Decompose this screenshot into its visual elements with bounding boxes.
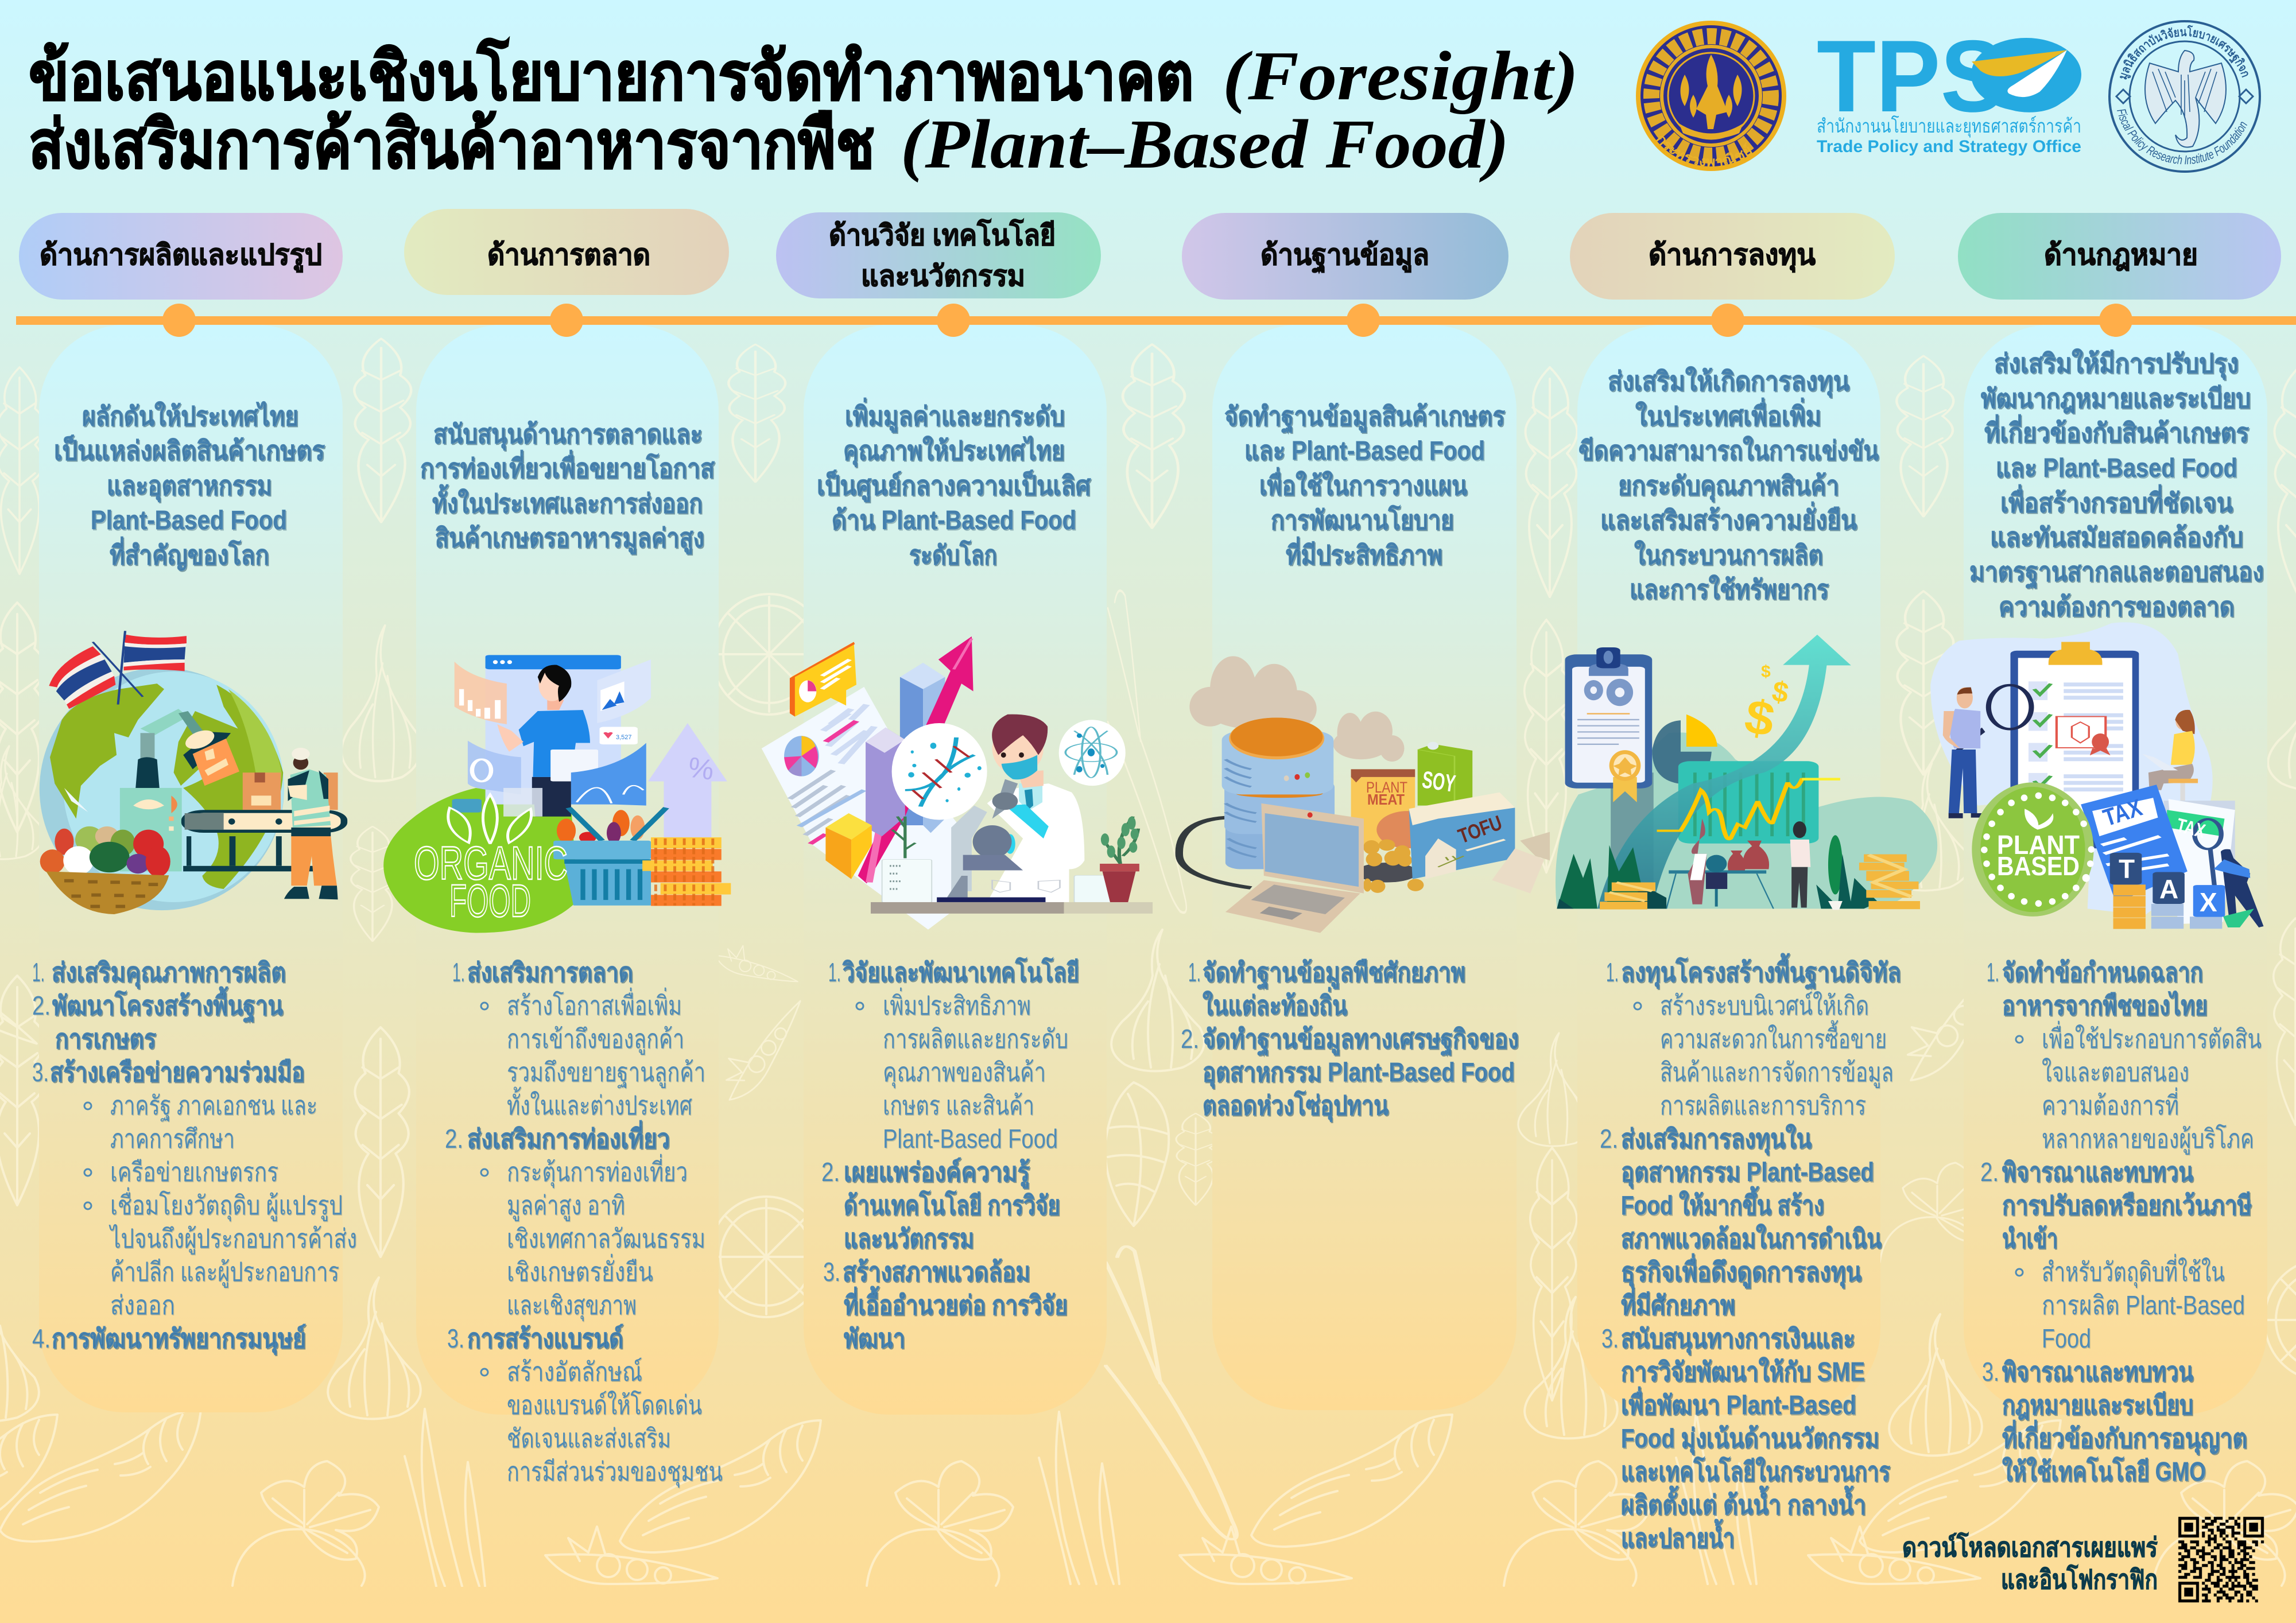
illustration: regulation checklist, plant based seal and tax: A (2159, 874, 2178, 904)
intro text: research: ระดับโลก (909, 539, 997, 570)
illustration: regulation checklist, plant based seal and tax: PLANT (1997, 830, 2080, 860)
list: research: คุณภาพของสินค้า (883, 1057, 1046, 1089)
illustration: organic food and online marketing: % (686, 751, 716, 786)
logo: fiscal policy research institute foundation: Fiscal Policy Research Institute Foundation (2117, 109, 2247, 164)
list: law: กฎหมายและระเบียบ (2002, 1390, 2193, 1420)
list: research: ที่เอื้ออำนวยต่อ การวิจัย (844, 1286, 1068, 1320)
list: marketing: ชัดเจนและส่งเสริม (507, 1423, 671, 1453)
list: research: สร้างสภาพแวดล้อม (843, 1257, 1030, 1287)
list: investment: เพื่อพัฒนา Plant-Based (1621, 1387, 1856, 1420)
heading: law: ด้านกฎหมาย (2044, 239, 2198, 271)
list: database: จัดทำฐานข้อมูลทางเศรษฐกิจของ (1203, 1024, 1519, 1056)
logo: TPSO (1817, 19, 2081, 156)
list: investment: การวิจัยพัฒนาให้กับ SME (1621, 1356, 1865, 1387)
list: investment: 2. (1600, 1124, 1618, 1154)
list: investment: Food มุ่งเน้นด้านนวัตกรรม (1621, 1423, 1879, 1455)
list: law: อาหารจากพืชของไทย (2002, 991, 2208, 1020)
footer download note (1902, 1532, 2158, 1594)
list: investment: อุตสาหกรรม Plant-Based (1621, 1157, 1874, 1189)
list: law: พิจารณาและทบทวน (2002, 1157, 2193, 1187)
intro text: database (1224, 401, 1505, 570)
list: database: 2. (1181, 1024, 1199, 1054)
heading: database (1182, 213, 1508, 300)
list: research: ด้านเทคโนโลยี การวิจัย (844, 1190, 1060, 1220)
panel: marketing (383, 209, 731, 1488)
heading: marketing: ด้านการตลาด (487, 239, 650, 271)
list: law: จัดทำข้อกำหนดฉลาก (2002, 957, 2203, 987)
list: investment: 3. (1601, 1323, 1619, 1353)
list: law: นำเข้า (2002, 1224, 2058, 1253)
list: marketing: 1. (452, 957, 465, 987)
list: production: การพัฒนาทรัพยากรมนุษย์ (52, 1323, 306, 1355)
illustration: database server, laptop and plant-based foods (1179, 656, 1550, 933)
illustration: globe, factory, worker, vegetables (40, 631, 344, 914)
list: marketing: มูลค่าสูง อาทิ (507, 1190, 625, 1221)
intro text: law: เพื่อสร้างกรอบที่ชัดเจน (2000, 484, 2233, 518)
list: production (32, 957, 357, 1355)
list: investment: สภาพแวดล้อมในการดำเนิน (1621, 1223, 1882, 1253)
illustration: investment growth chart: $ (1761, 662, 1771, 681)
intro text: law: และ Plant-Based Food (1996, 453, 2237, 483)
list: investment (1600, 953, 1901, 1553)
list: investment: สินค้าและการจัดการข้อมูล (1660, 1057, 1894, 1088)
illustration: regulation checklist, plant based seal and tax: T (2119, 854, 2135, 884)
list: production: 3. (32, 1057, 49, 1087)
list: production: ส่งเสริมคุณภาพการผลิต (52, 957, 286, 989)
list: marketing: 2. (445, 1124, 463, 1154)
list: investment: และเทคโนโลยีในกระบวนการ (1621, 1456, 1890, 1486)
intro text: marketing: การท่องเที่ยวเพื่อขยายโอกาส (420, 450, 715, 483)
list: investment: สนับสนุนทางการเงินและ (1621, 1323, 1855, 1355)
timeline (16, 304, 2296, 337)
list: investment: ธุรกิจเพื่อดึงดูดการลงทุน (1621, 1253, 1861, 1288)
list: marketing: กระตุ้นการท่องเที่ยว (507, 1154, 688, 1189)
QR code (2178, 1519, 2264, 1601)
illustration: regulation checklist, plant based seal and tax (1930, 622, 2264, 929)
list: investment: ลงทุนโครงสร้างพื้นฐานดิจิทัล (1621, 953, 1901, 989)
list: law: การปรับลดหรือยกเว้นภาษี (2002, 1190, 2252, 1220)
list: production: ส่งออก (110, 1290, 175, 1320)
list: database (1181, 957, 1519, 1122)
title line 2: ส่งเสริมการค้าสินค้าอาหารจากพืช (29, 109, 875, 183)
intro text: production: ผลักดันให้ประเทศไทย (82, 401, 298, 431)
list: law: 3. (1982, 1357, 1999, 1387)
illustration: regulation checklist, plant based seal and tax: X (2200, 887, 2217, 917)
list: marketing (445, 957, 723, 1488)
list: marketing: ส่งเสริมการตลาด (467, 957, 633, 987)
list: marketing: ส่งเสริมการท่องเที่ยว (467, 1120, 670, 1154)
list: research: การผลิตและยกระดับ (883, 1024, 1068, 1054)
intro text: production (54, 401, 325, 570)
heading: production: ด้านการผลิตและแปรรูป (40, 239, 322, 273)
panel: research, technology, innovation (762, 212, 1153, 1353)
illustration: investment growth chart: $ (1741, 689, 1778, 747)
heading: investment (1570, 213, 1895, 300)
intro text: database: การพัฒนานโยบาย (1271, 504, 1454, 535)
list: investment: Food ให้มากขึ้น สร้าง (1621, 1186, 1824, 1220)
intro text: law: ส่งเสริมให้มีการปรับปรุง (1994, 348, 2239, 380)
list: database: อุตสาหกรรม Plant-Based Food (1203, 1057, 1515, 1089)
intro text: production: เป็นแหล่งผลิตสินค้าเกษตร (54, 434, 325, 465)
list: law: ใจและตอบสนอง (2042, 1057, 2189, 1087)
intro text: investment (1578, 366, 1879, 604)
list: production: ภาครัฐ ภาคเอกชน และ (110, 1090, 317, 1121)
list: marketing: เชิงเกษตรยั่งยืน (507, 1253, 653, 1287)
logo: ministry of commerce seal: กระทรวงพาณิชย์ (1656, 136, 1752, 166)
heading: research (776, 212, 1101, 298)
illustration: organic food and online marketing: FOOD (449, 875, 531, 926)
intro text: law: พัฒนากฎหมายและระเบียบ (1981, 383, 2251, 413)
list: law: ความต้องการที่ (2042, 1087, 2179, 1120)
illustration: scientist with microscope and charts (762, 636, 1153, 930)
list: production: ค้าปลีก และผู้ประกอบการ (110, 1257, 339, 1288)
intro text: investment: ในกระบวนการผลิต (1634, 539, 1823, 570)
logo: TPSO: O (1980, 19, 2079, 133)
intro text: production: และอุตสาหกรรม (107, 471, 272, 502)
list: research: 3. (823, 1257, 840, 1287)
list: investment: 1. (1606, 957, 1619, 987)
list: production: 1. (32, 957, 45, 987)
list: law: ที่เกี่ยวข้องกับการอนุญาต (2002, 1420, 2247, 1455)
logo: fiscal policy research institute foundation (2108, 20, 2261, 173)
heading: law (1958, 213, 2281, 300)
list: database: 1. (1188, 957, 1201, 987)
list: production: สร้างเครือข่ายความร่วมมือ (50, 1057, 305, 1087)
list: production: เครือข่ายเกษตรกร (110, 1157, 278, 1187)
intro text: law: ความต้องการของตลาด (1999, 592, 2235, 622)
list: marketing: 3. (447, 1323, 464, 1353)
illustration: database server, laptop and plant-based foods: SOY (1421, 766, 1457, 797)
list: database: ตลอดห่วงโซ่อุปทาน (1203, 1090, 1389, 1122)
intro text: investment: ในประเทศเพื่อเพิ่ม (1635, 398, 1821, 431)
intro text: database: และ Plant-Based Food (1244, 436, 1485, 465)
list: research: เผยแพร่องค์ความรู้ (844, 1157, 1030, 1189)
intro text: database: จัดทำฐานข้อมูลสินค้าเกษตร (1224, 401, 1505, 433)
list: production: ภาคการศึกษา (110, 1124, 235, 1154)
illustration: organic food and online marketing: 3,527 (616, 734, 632, 741)
heading: database: ด้านฐานข้อมูล (1261, 239, 1429, 273)
list: investment: ที่มีศักยภาพ (1621, 1287, 1735, 1320)
illustration: organic food and online marketing: ORGANIC (414, 837, 568, 890)
list: production: 2. (32, 991, 51, 1020)
background vegetable line-art pattern (0, 339, 2296, 1586)
intro text: research: เพิ่มมูลค่าและยกระดับ (845, 398, 1065, 433)
list: research: Plant-Based Food (883, 1124, 1058, 1154)
illustration: database server, laptop and plant-based foods: TOFU (1455, 810, 1505, 848)
list: investment: การผลิตและการบริการ (1660, 1090, 1866, 1120)
list: marketing: และเชิงสุขภาพ (507, 1290, 637, 1322)
intro text: database: เพื่อใช้ในการวางแผน (1259, 467, 1467, 500)
intro text: research: ด้าน Plant-Based Food (832, 505, 1076, 535)
footer download note: และอินโฟกราฟิก (2001, 1564, 2158, 1594)
list: law: Food (2042, 1323, 2091, 1353)
title line 2: (Plant–Based Food) (901, 106, 1509, 183)
title line 2 (29, 106, 1509, 183)
intro text: production: Plant-Based Food (91, 505, 287, 535)
list: research: วิจัยและพัฒนาเทคโนโลยี (842, 957, 1079, 987)
list: investment: ส่งเสริมการลงทุนใน (1621, 1123, 1812, 1155)
title line 1: ข้อเสนอแนะเชิงนโยบายการจัดทำภาพอนาคต (29, 38, 1194, 114)
list: production: เชื่อมโยงวัตถุดิบ ผู้แปรรูป (110, 1187, 343, 1222)
illustration: regulation checklist, plant based seal and tax: TAX (2174, 814, 2208, 842)
intro text: marketing: สินค้าเกษตรอาหารมูลค่าสูง (435, 523, 704, 554)
intro text: law: และทันสมัยสอดคล้องกับ (1990, 522, 2243, 552)
heading: research: และนวัตกรรม (861, 260, 1025, 292)
list: production: การเกษตร (55, 1024, 156, 1054)
list: research: เพิ่มประสิทธิภาพ (883, 987, 1031, 1020)
logo: TPSO: Trade Policy and Strategy Office (1817, 137, 2081, 156)
panel: database (1179, 213, 1550, 1122)
list: database: จัดทำฐานข้อมูลพืชศักยภาพ (1203, 957, 1465, 989)
list: production: ไปจนถึงผู้ประกอบการค้าส่ง (108, 1224, 357, 1255)
list: research: 1. (828, 957, 841, 987)
list: investment: สร้างระบบนิเวศน์ให้เกิด (1660, 991, 1869, 1020)
list: investment: และปลายน้ำ (1621, 1519, 1735, 1553)
illustration: organic food and online marketing (383, 655, 731, 933)
intro text: investment: และการใช้ทรัพยากร (1630, 574, 1829, 604)
list: investment: ผลิตตั้งแต่ ต้นน้ำ กลางน้ำ (1621, 1485, 1866, 1520)
list: law: 1. (1987, 957, 1999, 987)
list: marketing: การเข้าถึงของลูกค้า (507, 1024, 684, 1055)
illustration: database server, laptop and plant-based foods: MEAT (1367, 791, 1405, 808)
intro text: investment: ส่งเสริมให้เกิดการลงทุน (1608, 366, 1849, 398)
logo: TPSO: TPS (1817, 19, 2005, 133)
illustration: database server, laptop and plant-based foods: PLANT (1366, 779, 1407, 796)
heading: marketing (404, 209, 729, 295)
intro text: marketing: ทั้งในประเทศและการส่งออก (432, 484, 703, 518)
intro text: marketing: สนับสนุนด้านการตลาดและ (433, 419, 703, 451)
list: law: การผลิต Plant-Based (2042, 1290, 2245, 1320)
illustration: regulation checklist, plant based seal and tax: TAX (2100, 794, 2145, 832)
list: marketing: สร้างโอกาสเพื่อเพิ่ม (507, 987, 682, 1020)
list: production: พัฒนาโครงสร้างพื้นฐาน (52, 986, 283, 1023)
list: marketing: การมีส่วนร่วมของชุมชน (507, 1457, 723, 1488)
title line 1: (Foresight) (1223, 37, 1578, 115)
panel: production and processing (19, 213, 357, 1355)
list: law: พิจารณาและทบทวน (2002, 1357, 2193, 1387)
list: law: สำหรับวัตถุดิบที่ใช้ใน (2042, 1253, 2225, 1288)
list: research (821, 957, 1079, 1353)
list: database: ในแต่ละท้องถิ่น (1203, 987, 1347, 1020)
list: marketing: สร้างอัตลักษณ์ (507, 1357, 642, 1387)
intro text: law: ที่เกี่ยวข้องกับสินค้าเกษตร (1984, 414, 2249, 448)
intro text: investment: และเสริมสร้างความยั่งยืน (1600, 502, 1857, 535)
logo: TPSO: สำนักงานนโยบายและยุทธศาสตร์การค้า (1817, 115, 2081, 138)
list: marketing: ทั้งในและต่างประเทศ (507, 1086, 692, 1120)
list: marketing: เชิงเทศกาลวัฒนธรรม (507, 1224, 705, 1253)
list: marketing: ของแบรนด์ให้โดดเด่น (507, 1390, 702, 1420)
intro text: database: ที่มีประสิทธิภาพ (1286, 537, 1442, 570)
list: law (1980, 957, 2262, 1486)
list: research: และนวัตกรรม (844, 1224, 974, 1253)
footer download note: ดาวน์โหลดเอกสารเผยแพร่ (1902, 1532, 2158, 1562)
intro text: production: ที่สำคัญของโลก (110, 537, 269, 570)
panel: law (1930, 213, 2281, 1486)
list: marketing: รวมถึงขยายฐานลูกค้า (507, 1057, 705, 1088)
list: production: 4. (32, 1323, 51, 1353)
illustration: investment growth chart: $ (1770, 675, 1791, 709)
heading: production (19, 213, 343, 300)
intro text: law (1969, 348, 2264, 622)
list: research: พัฒนา (844, 1323, 905, 1353)
list: investment: ความสะดวกในการซื้อขาย (1660, 1020, 1887, 1054)
list: research: 2. (821, 1157, 840, 1187)
panel backgrounds (39, 325, 2267, 1415)
intro text: research (817, 398, 1091, 570)
intro text: research: เป็นศูนย์กลางความเป็นเลิศ (817, 469, 1091, 502)
panel: investment (1556, 213, 1937, 1553)
intro text: investment: ขีดความสามารถในการแข่งขัน (1578, 435, 1879, 465)
heading: investment: ด้านการลงทุน (1649, 239, 1816, 273)
intro text: investment: ยกระดับคุณภาพสินค้า (1618, 471, 1839, 502)
list: marketing: การสร้างแบรนด์ (467, 1323, 623, 1353)
intro text: research: คุณภาพให้ประเทศไทย (843, 435, 1065, 467)
list: research: เกษตร และสินค้า (883, 1090, 1034, 1120)
illustration: regulation checklist, plant based seal and tax: BASED (1997, 851, 2080, 881)
list: law: ให้ใช้เทคโนโลยี GMO (2002, 1456, 2206, 1486)
list: law: 2. (1980, 1157, 1999, 1187)
title (29, 37, 1578, 183)
illustration: investment growth chart (1556, 635, 1937, 910)
intro text: marketing (420, 419, 715, 554)
heading: research: ด้านวิจัย เทคโนโลยี (829, 218, 1056, 251)
logo: ministry of commerce seal (1636, 21, 1786, 171)
intro text: law: มาตรฐานสากลและตอบสนอง (1969, 557, 2264, 589)
